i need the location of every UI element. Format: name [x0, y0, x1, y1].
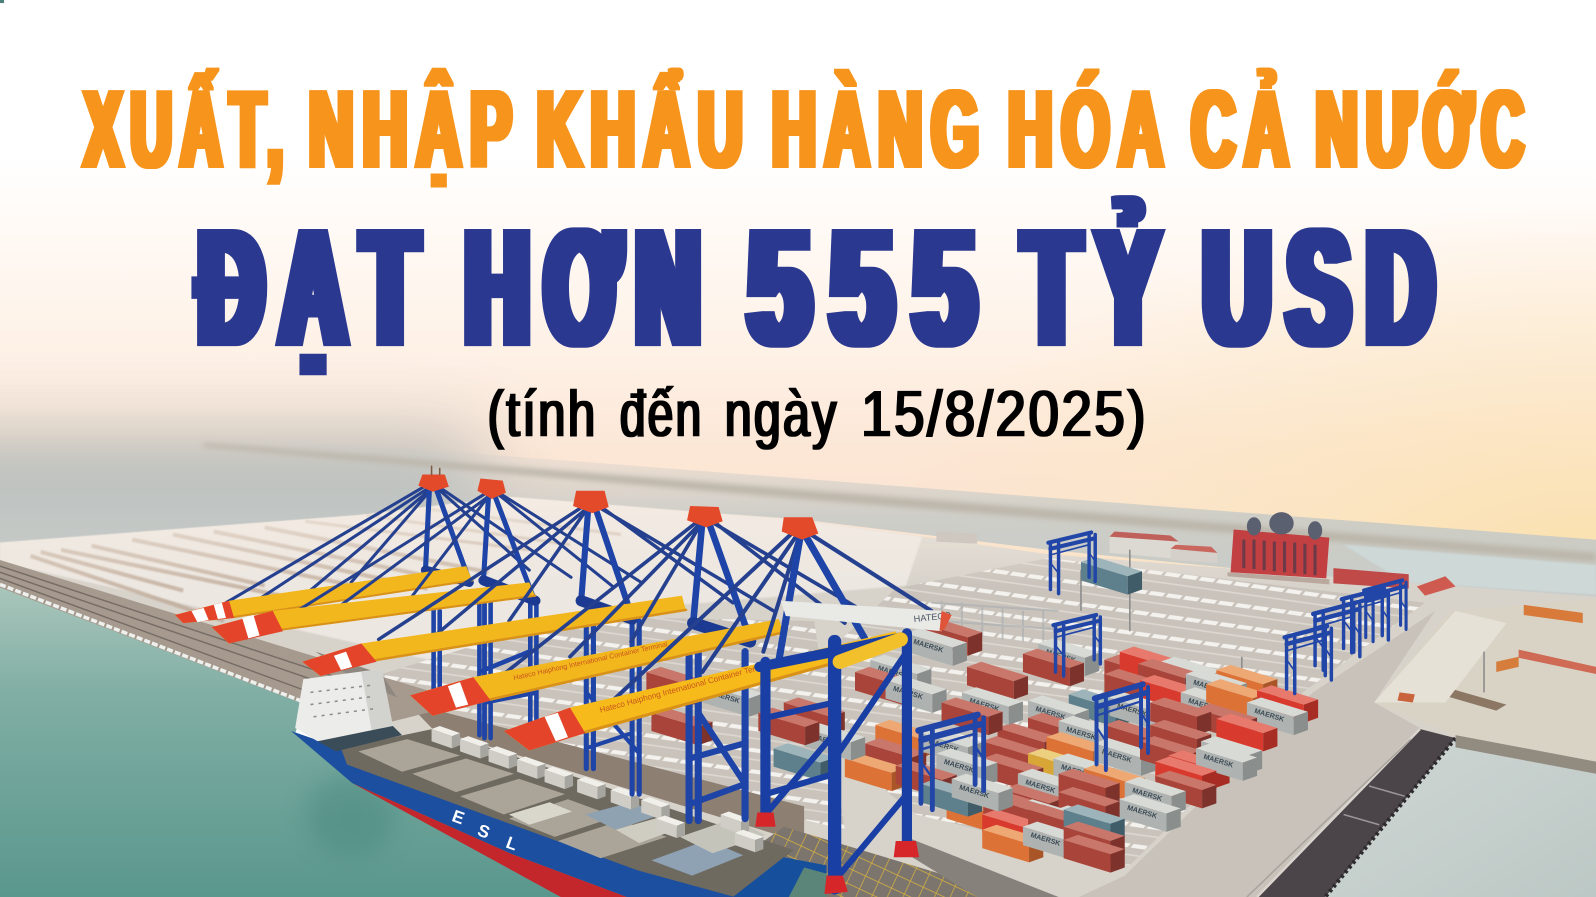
title line 1: CẢ — [1191, 68, 1297, 190]
port yard ground — [0, 497, 1596, 897]
ship-to-shore cranes — [175, 466, 952, 894]
date subtitle: đến — [620, 377, 703, 450]
date subtitle: ngày — [725, 377, 839, 450]
title line 1: NHẬP — [309, 68, 521, 190]
low red building — [936, 531, 1456, 596]
quay apron under cranes — [758, 827, 1018, 897]
grey stacked reach frames — [931, 601, 1059, 641]
far right orange containers — [1398, 605, 1596, 703]
crane 5 — [504, 517, 952, 894]
crane 3 — [302, 491, 774, 794]
far sea and breakwater — [0, 433, 1596, 601]
land haze — [0, 497, 1596, 631]
container ship — [291, 669, 826, 897]
crane 1 — [175, 466, 571, 735]
deck — [341, 729, 794, 897]
title line 1 — [84, 68, 1532, 190]
crane 4: Hateco Haiphong International Container Terminal — [513, 640, 669, 682]
title line 2: HƠN — [466, 197, 716, 379]
title line 1: KHẨU — [537, 68, 752, 190]
quay-side deck containers — [432, 726, 763, 852]
hull lettering — [450, 806, 521, 855]
crane 5: Hateco Haiphong International Container Terminal — [599, 659, 775, 715]
title line 2: ĐẠT — [198, 197, 435, 379]
water left — [0, 586, 651, 897]
pier with rails — [0, 560, 468, 723]
buildings — [936, 512, 1596, 703]
date subtitle: (tính — [488, 377, 597, 450]
title line 2: TỶ — [1023, 197, 1176, 379]
hull lettering: S — [475, 820, 493, 843]
left stacks behind crane — [921, 618, 982, 656]
port photograph — [0, 433, 1596, 897]
crane 5: HATECO — [913, 610, 952, 624]
crane 4 — [410, 506, 884, 821]
red headquarters building — [1228, 512, 1329, 584]
hull lettering: E — [450, 806, 467, 828]
white warehouse — [1109, 531, 1217, 563]
date subtitle — [488, 377, 1148, 450]
crane 2 — [212, 479, 641, 745]
title line 2 — [198, 197, 1451, 379]
date subtitle: 15/8/2025) — [861, 377, 1148, 450]
title line 2: 555 — [749, 197, 996, 379]
hull lettering: L — [503, 832, 521, 855]
container stacks — [646, 557, 1318, 873]
ship superstructure — [295, 669, 402, 751]
title line 1: XUẤT, — [84, 68, 292, 190]
hull red — [352, 783, 627, 897]
small yard gantry cranes — [918, 532, 1406, 809]
title line 1: HÓA — [1008, 68, 1172, 190]
water right — [1325, 738, 1596, 897]
title line 1: HÀNG — [772, 68, 988, 190]
dark quay right — [1247, 729, 1596, 897]
corner mark — [0, 0, 4, 3]
hull reflection — [305, 774, 397, 855]
hull blue — [291, 731, 826, 897]
